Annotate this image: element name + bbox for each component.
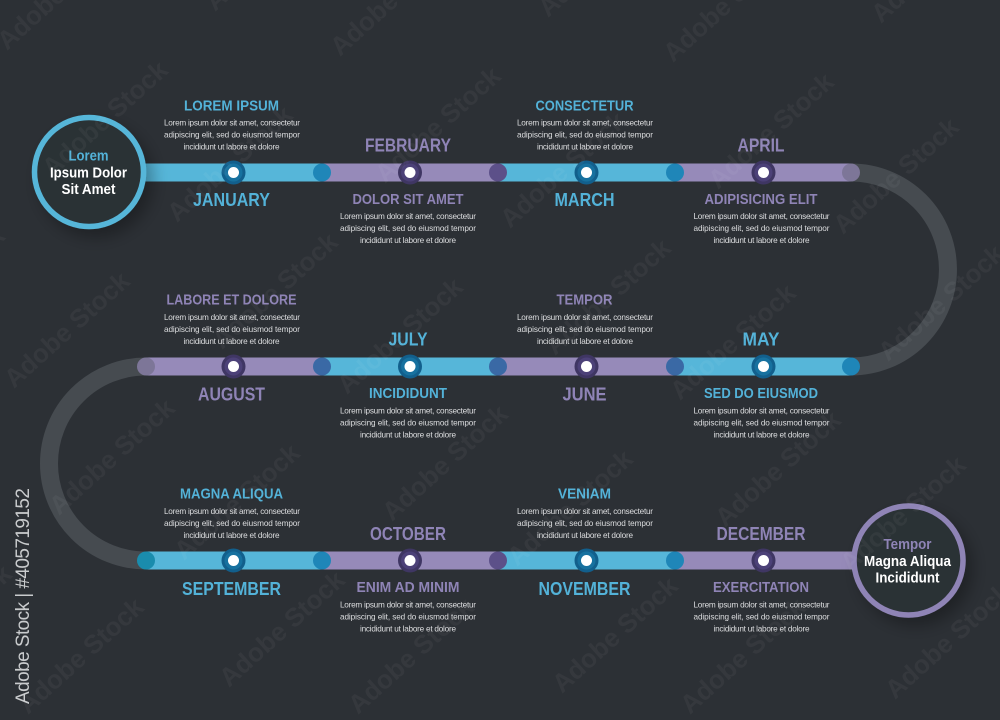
block: October: OCTOBER: [370, 524, 446, 544]
watermark pattern: Adobe Stock: [827, 111, 965, 239]
block: August: LABORE ET DOLORE: [166, 292, 297, 308]
block: February: [340, 136, 476, 245]
block: February: incididunt ut labore et dolore: [360, 236, 456, 245]
block: September: [164, 486, 300, 599]
block: July: [340, 330, 476, 440]
watermark pattern: Adobe Stock: [709, 404, 847, 532]
block: October: [340, 524, 476, 634]
watermark pattern: Adobe Stock: [834, 449, 972, 577]
end circle: Tempor: [884, 537, 932, 553]
block: April: [694, 136, 830, 245]
block: May: Lorem ipsum dolor sit amet, consectetur: [694, 406, 830, 416]
block: January: [164, 98, 300, 210]
side stock credit: Adobe Stock | #405719152: [13, 488, 34, 704]
watermark pattern: Adobe Stock: [0, 265, 136, 393]
block: March: Lorem ipsum dolor sit amet, consectetur: [517, 118, 653, 128]
block: June: TEMPOR: [556, 292, 613, 308]
block: September: SEPTEMBER: [182, 579, 281, 599]
watermark pattern: Adobe Stock: [376, 398, 514, 526]
block: December: incididunt ut labore et dolore: [714, 624, 810, 634]
block: January: incididunt ut labore et dolore: [184, 142, 280, 152]
block: February: DOLOR SIT AMET: [352, 192, 464, 208]
watermark pattern: Adobe Stock: [36, 54, 174, 182]
watermark pattern: Adobe Stock: [664, 277, 802, 405]
block: January: LOREM IPSUM: [184, 98, 279, 114]
watermark pattern: Adobe Stock: [674, 591, 812, 719]
block: November: incididunt ut labore et dolore: [537, 531, 633, 540]
block: August: incididunt ut labore et dolore: [184, 337, 280, 346]
block: September: adipiscing elit, sed do eiusmod tempor: [164, 519, 300, 528]
watermark pattern: Adobe Stock: [206, 226, 344, 354]
watermark pattern: Adobe Stock: [161, 99, 299, 227]
block: February: adipiscing elit, sed do eiusmod tempor: [340, 224, 476, 233]
block: June: [517, 292, 653, 404]
block: May: incididunt ut labore et dolore: [714, 430, 810, 440]
end circle: Incididunt: [876, 571, 940, 587]
block: September: Lorem ipsum dolor sit amet, consectetur: [164, 507, 300, 516]
block: June: incididunt ut labore et dolore: [537, 337, 633, 346]
block: August: adipiscing elit, sed do eiusmod tempor: [164, 325, 300, 334]
block: November: VENIAM: [558, 486, 611, 502]
block: May: MAY: [742, 330, 780, 350]
block: November: Lorem ipsum dolor sit amet, consectetur: [517, 507, 653, 516]
block: January: JANUARY: [193, 190, 270, 210]
block: November: [517, 486, 653, 599]
start circle: Ipsum Dolor: [50, 166, 127, 182]
watermark pattern: Adobe Stock: [331, 271, 469, 399]
watermark pattern: Adobe Stock: [213, 564, 351, 692]
block: April: Lorem ipsum dolor sit amet, consectetur: [694, 212, 830, 221]
connector arc: right: [851, 172, 948, 366]
watermark pattern: Adobe Stock: [43, 392, 181, 520]
watermark pattern: Adobe Stock: [702, 66, 840, 194]
start circle: Lorem: [68, 149, 108, 165]
watermark pattern: Adobe Stock: [342, 591, 480, 719]
block: October: incididunt ut labore et dolore: [360, 624, 456, 634]
block: September: MAGNA ALIQUA: [180, 486, 283, 502]
block: April: APRIL: [738, 136, 785, 156]
block: February: FEBRUARY: [365, 136, 451, 156]
block: December: DECEMBER: [716, 524, 806, 544]
block: June: Lorem ipsum dolor sit amet, consectetur: [517, 313, 653, 322]
block: October: adipiscing elit, sed do eiusmod tempor: [340, 612, 476, 622]
block: June: JUNE: [562, 384, 606, 404]
block: July: Lorem ipsum dolor sit amet, consectetur: [340, 406, 476, 416]
end circle: Magna Aliqua: [864, 554, 952, 570]
timeline row 3: [137, 548, 860, 572]
watermark pattern: Adobe Stock: [494, 105, 632, 233]
block: April: ADIPISICING ELIT: [704, 192, 818, 208]
block: August: Lorem ipsum dolor sit amet, consectetur: [164, 313, 300, 322]
block: December: Lorem ipsum dolor sit amet, consectetur: [694, 600, 830, 610]
block: April: adipiscing elit, sed do eiusmod tempor: [694, 224, 830, 233]
block: March: adipiscing elit, sed do eiusmod tempor: [517, 130, 653, 140]
timeline row 1: [140, 160, 860, 184]
block: August: [164, 292, 300, 404]
watermark pattern: Adobe Stock: [501, 443, 639, 571]
block: November: adipiscing elit, sed do eiusmod tempor: [517, 519, 653, 528]
block: December: [694, 524, 830, 634]
block: November: NOVEMBER: [538, 579, 630, 599]
watermark pattern: Adobe Stock: [539, 232, 677, 360]
block: March: CONSECTETUR: [536, 98, 634, 114]
block: December: adipiscing elit, sed do eiusmod tempor: [694, 612, 830, 622]
block: October: ENIM AD MINIM: [356, 580, 460, 596]
connector arc: left: [49, 366, 146, 560]
block: July: INCIDIDUNT: [369, 386, 447, 402]
block: September: incididunt ut labore et dolore: [184, 531, 280, 540]
watermark pattern: Adobe Stock: [12, 591, 150, 719]
block: June: adipiscing elit, sed do eiusmod tempor: [517, 325, 653, 334]
watermark pattern: Adobe Stock: [546, 570, 684, 698]
block: March: incididunt ut labore et dolore: [537, 142, 633, 152]
timeline row 2: [137, 354, 860, 378]
block: July: JULY: [388, 330, 428, 350]
block: January: adipiscing elit, sed do eiusmod tempor: [164, 130, 300, 140]
end circle: [854, 506, 963, 615]
block: April: incididunt ut labore et dolore: [714, 236, 810, 245]
block: October: Lorem ipsum dolor sit amet, consectetur: [340, 600, 476, 610]
block: January: Lorem ipsum dolor sit amet, consectetur: [164, 118, 300, 128]
block: May: SED DO EIUSMOD: [704, 386, 818, 402]
block: December: EXERCITATION: [713, 580, 809, 596]
block: May: [694, 330, 830, 440]
block: July: incididunt ut labore et dolore: [360, 430, 456, 440]
watermark pattern: Adobe Stock: [369, 60, 507, 188]
start circle: [34, 118, 144, 226]
block: July: adipiscing elit, sed do eiusmod tempor: [340, 418, 476, 428]
block: August: AUGUST: [198, 384, 265, 404]
watermark pattern: Adobe Stock: [168, 437, 306, 565]
block: March: [517, 98, 653, 210]
block: February: Lorem ipsum dolor sit amet, consectetur: [340, 212, 476, 221]
start circle: Sit Amet: [62, 182, 116, 198]
block: May: adipiscing elit, sed do eiusmod tempor: [694, 418, 830, 428]
block: March: MARCH: [554, 190, 614, 210]
